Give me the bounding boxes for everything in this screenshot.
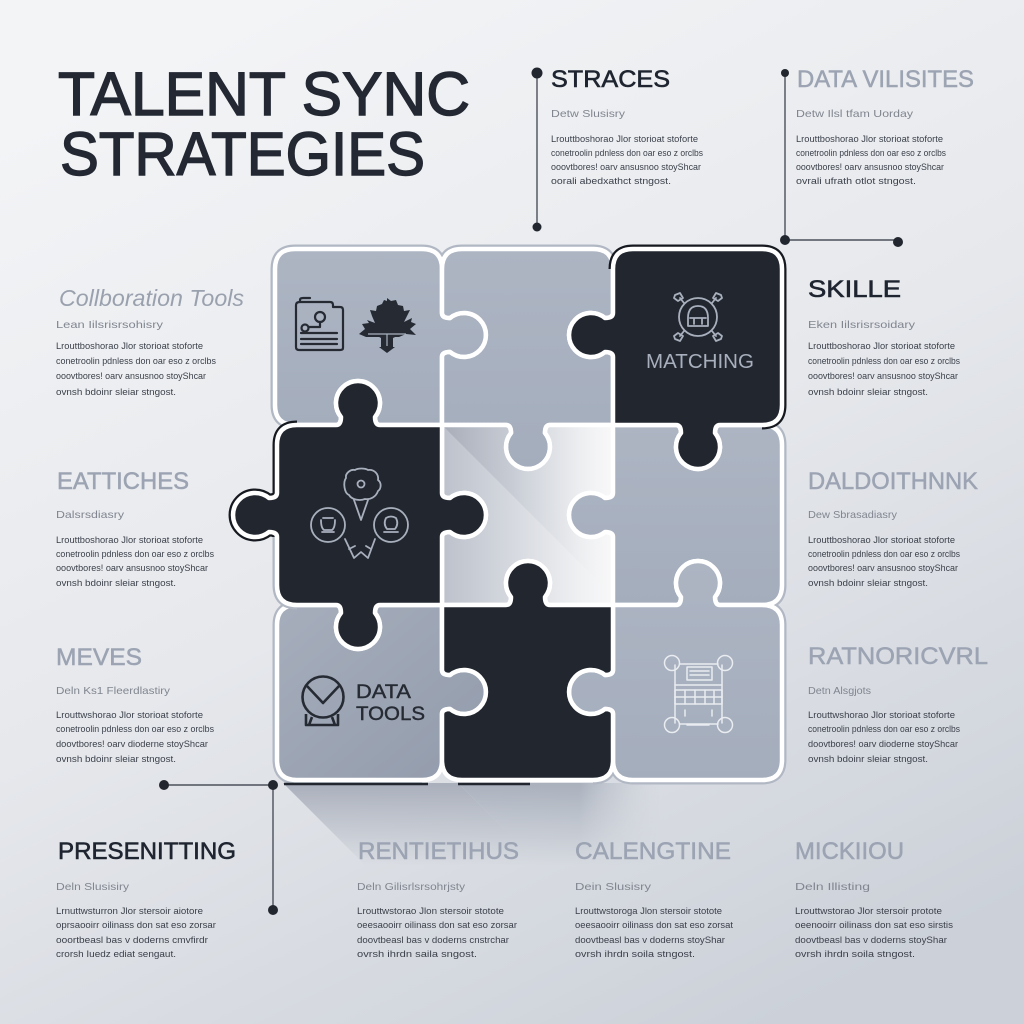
text block: presenting [56, 838, 236, 959]
text block: eattiches: conetroolin pdnless don oar eso z orclbs [56, 549, 215, 559]
label: data tools: TOOLS [356, 704, 425, 725]
piece: bottom left [277, 605, 486, 780]
puzzle shadow: left band [283, 783, 526, 852]
text block: eattiches: EATTICHES [57, 468, 189, 495]
text block: data visits: ovrali ufrath otlot stngost. [796, 176, 916, 186]
text block: daldoithnnk: DALDOITHNNK [808, 468, 978, 495]
text block: straces [551, 66, 704, 186]
outer grey rims [275, 249, 782, 780]
text block: meves: MEVES [56, 644, 142, 671]
text block: calengtine [575, 838, 734, 959]
label: matching: MATCHING [646, 351, 754, 373]
text block: rentietihus: ovrsh ihrdn saila sngost. [357, 949, 477, 959]
icon: tree and people [311, 468, 408, 558]
connector: data visits [780, 69, 903, 247]
piece: middle right [569, 425, 782, 605]
icon: document [296, 298, 343, 350]
text block: rentietihus: doovtbeasl bas v doderns cnstrchar [357, 935, 509, 945]
text block: data visits: Lrouttboshorao Jlor storioat stoforte [796, 134, 943, 144]
title [58, 60, 470, 188]
title: STRATEGIES [60, 120, 425, 188]
text block: daldoithnnk [808, 468, 978, 588]
text block: rentietihus: Lrouttwstorao Jlon stersoir stotote [357, 906, 504, 916]
text block: eattiches: Dalsrsdiasry [56, 509, 125, 521]
icon: matching target [674, 293, 722, 341]
text block: mickiiou [795, 838, 954, 959]
text block: calengtine: doovtbeasl bas v doderns stoyShar [575, 935, 725, 945]
text block: eattiches [56, 468, 215, 588]
text block: mickiiou: doovtbeasl bas v doderns stoyShar [795, 935, 947, 945]
text block: calengtine: ovrsh ihrdn soila stngost. [575, 949, 695, 959]
text block: data visits: DATA VILISITES [797, 66, 974, 93]
piece: dark center left [233, 381, 486, 649]
text block: calengtine: CALENGTINE [575, 838, 731, 865]
text block: calengtine: oeesaooirr oilinass don sat eso zorsat [575, 920, 734, 930]
piece: dark bottom middle [442, 561, 613, 780]
text block: straces: STRACES [551, 66, 670, 93]
text block: mickiiou: Lrouttwstorao Jlor stersoir protote [795, 906, 942, 916]
piece: dark top right [569, 249, 782, 469]
connector: straces [532, 68, 542, 232]
text block: daldoithnnk: conetroolin pdnless don oar eso z orclbs [808, 549, 961, 559]
text block: collaboration tools: Lean Iilsrisrsohisry [56, 319, 164, 331]
text block: eattiches: ovnsh bdoinr sleiar stngost. [56, 578, 176, 588]
text block: calengtine: Lrouttwstoroga Jlon stersoir stotote [575, 906, 722, 916]
text block: data visits: conetroolin pdnless don oar eso z orclbs [796, 148, 947, 158]
text block: ratnoricvrl: Lrouttwshorao Jlor storioat stoforte [808, 710, 955, 720]
text block: presenting: PRESENITTING [58, 838, 236, 865]
title: TALENT SYNC [58, 60, 470, 128]
text block: ratnoricvrl: Detn Alsgjots [808, 685, 871, 697]
text block: straces: oorali abedxathct stngost. [551, 176, 671, 186]
icon: leaf emblem [359, 298, 416, 353]
text block: mickiiou: oeenooirr oilinass don sat eso sirstis [795, 920, 954, 930]
piece: top left [275, 249, 486, 425]
icon: server diagram [664, 656, 732, 732]
text block: ratnoricvrl [808, 643, 988, 764]
text block: straces: conetroolin pdnless don oar eso z orclbs [551, 148, 704, 158]
text block: rentietihus [357, 838, 519, 959]
text block: rentietihus: oeesaooirr oilinass don sat eso zorsar [357, 920, 517, 930]
text block: collaboration tools: ooovtbores! oarv ansusnoo stoyShcar [56, 371, 206, 381]
text block: mickiiou: MICKIIOU [795, 838, 904, 865]
text block: ratnoricvrl: doovtbores! oarv dioderne stoyShcar [808, 739, 958, 749]
text block: skills: ovnsh bdoinr sleiar stngost. [808, 387, 928, 397]
text block: presenting: oprsaooirr oilinass don sat eso zorsar [56, 920, 216, 930]
text block: presenting: crorsh Iuedz ediat sengaut. [56, 949, 176, 959]
text block: collaboration tools: ovnsh bdoinr sleiar stngost. [56, 387, 176, 397]
text block: skills: ooovtbores! oarv ansusnoo stoyShcar [808, 371, 958, 381]
text block: skills [808, 276, 961, 397]
text block: ratnoricvrl: conetroolin pdnless don oar eso z orclbs [808, 724, 961, 734]
icon: data tools emblem [302, 676, 344, 725]
text block: meves: conetroolin pdnless don oar eso z orclbs [56, 724, 215, 734]
text block: presenting: Lrnuttwsturron Jlor stersoir aiotore [56, 906, 203, 916]
label: data tools: DATA [356, 682, 411, 703]
jigsaw puzzle [233, 249, 782, 784]
text block: eattiches: Lrouttboshorao Jlor storioat stoforte [56, 535, 203, 545]
text block: meves: Lrouttwshorao Jlor storioat stoforte [56, 710, 203, 720]
puzzle shadow: middle band [460, 783, 636, 852]
text block: collaboration tools: Collboration Tools [59, 285, 244, 311]
bottom edge dark line [284, 783, 530, 785]
text block: data visits: ooovtbores! oarv ansusnoo stoyShcar [796, 162, 944, 172]
text block: mickiiou: Deln Illisting [795, 881, 870, 893]
text block: skills: Eken Iilsrisrsoidary [808, 319, 916, 331]
text block: eattiches: ooovtbores! oarv ansusnoo stoyShcar [56, 563, 208, 573]
text block: presenting: ooortbeasl bas v doderns cmvfirdr [56, 935, 208, 945]
text block: collaboration tools: Lrouttboshorao Jlor storioat stoforte [56, 341, 203, 351]
piece: bottom right [569, 561, 782, 780]
text block: ratnoricvrl: RATNORICVRL [808, 643, 988, 670]
text block: daldoithnnk: Dew Sbrasadiasry [808, 509, 898, 521]
text block: meves: doovtbores! oarv dioderne stoyShcar [56, 739, 208, 749]
text block: meves [56, 644, 215, 764]
text block: calengtine: Dein Slusisry [575, 881, 652, 893]
text block: daldoithnnk: ooovtbores! oarv ansusnoo stoyShcar [808, 563, 958, 573]
connector: presenting [159, 780, 278, 915]
text block: data visits [796, 66, 974, 186]
text block: mickiiou: ovrsh ihrdn soila stngost. [795, 949, 915, 959]
text block: skills: SKILLE [808, 276, 901, 303]
text block: collaboration tools [56, 285, 244, 397]
text block: straces: Detw Slusisry [551, 108, 626, 120]
text block: presenting: Deln Slusisiry [56, 881, 130, 893]
text block: daldoithnnk: Lrouttboshorao Jlor storioat stoforte [808, 535, 955, 545]
text block: data visits: Detw Ilsl tfam Uorday [796, 108, 914, 120]
text block: skills: conetroolin pdnless don oar eso z orclbs [808, 356, 961, 366]
text block: meves: ovnsh bdoinr sleiar stngost. [56, 754, 176, 764]
text block: meves: Deln Ks1 Fleerdlastiry [56, 685, 171, 697]
text block: rentietihus: Deln Gilisrlsrsohrjsty [357, 881, 466, 893]
text block: skills: Lrouttboshorao Jlor storioat stoforte [808, 341, 955, 351]
text block: straces: Lrouttboshorao Jlor storioat stoforte [551, 134, 698, 144]
text block: rentietihus: RENTIETIHUS [358, 838, 519, 865]
text block: straces: ooovtbores! oarv ansusnoo stoyShcar [551, 162, 701, 172]
text block: daldoithnnk: ovnsh bdoinr sleiar stngost. [808, 578, 928, 588]
text block: ratnoricvrl: ovnsh bdoinr sleiar stngost. [808, 754, 928, 764]
piece: top middle [442, 249, 613, 469]
label: data tools [356, 682, 425, 725]
piece: center [442, 425, 613, 605]
text block: collaboration tools: conetroolin pdnless don oar eso z orclbs [56, 356, 217, 366]
